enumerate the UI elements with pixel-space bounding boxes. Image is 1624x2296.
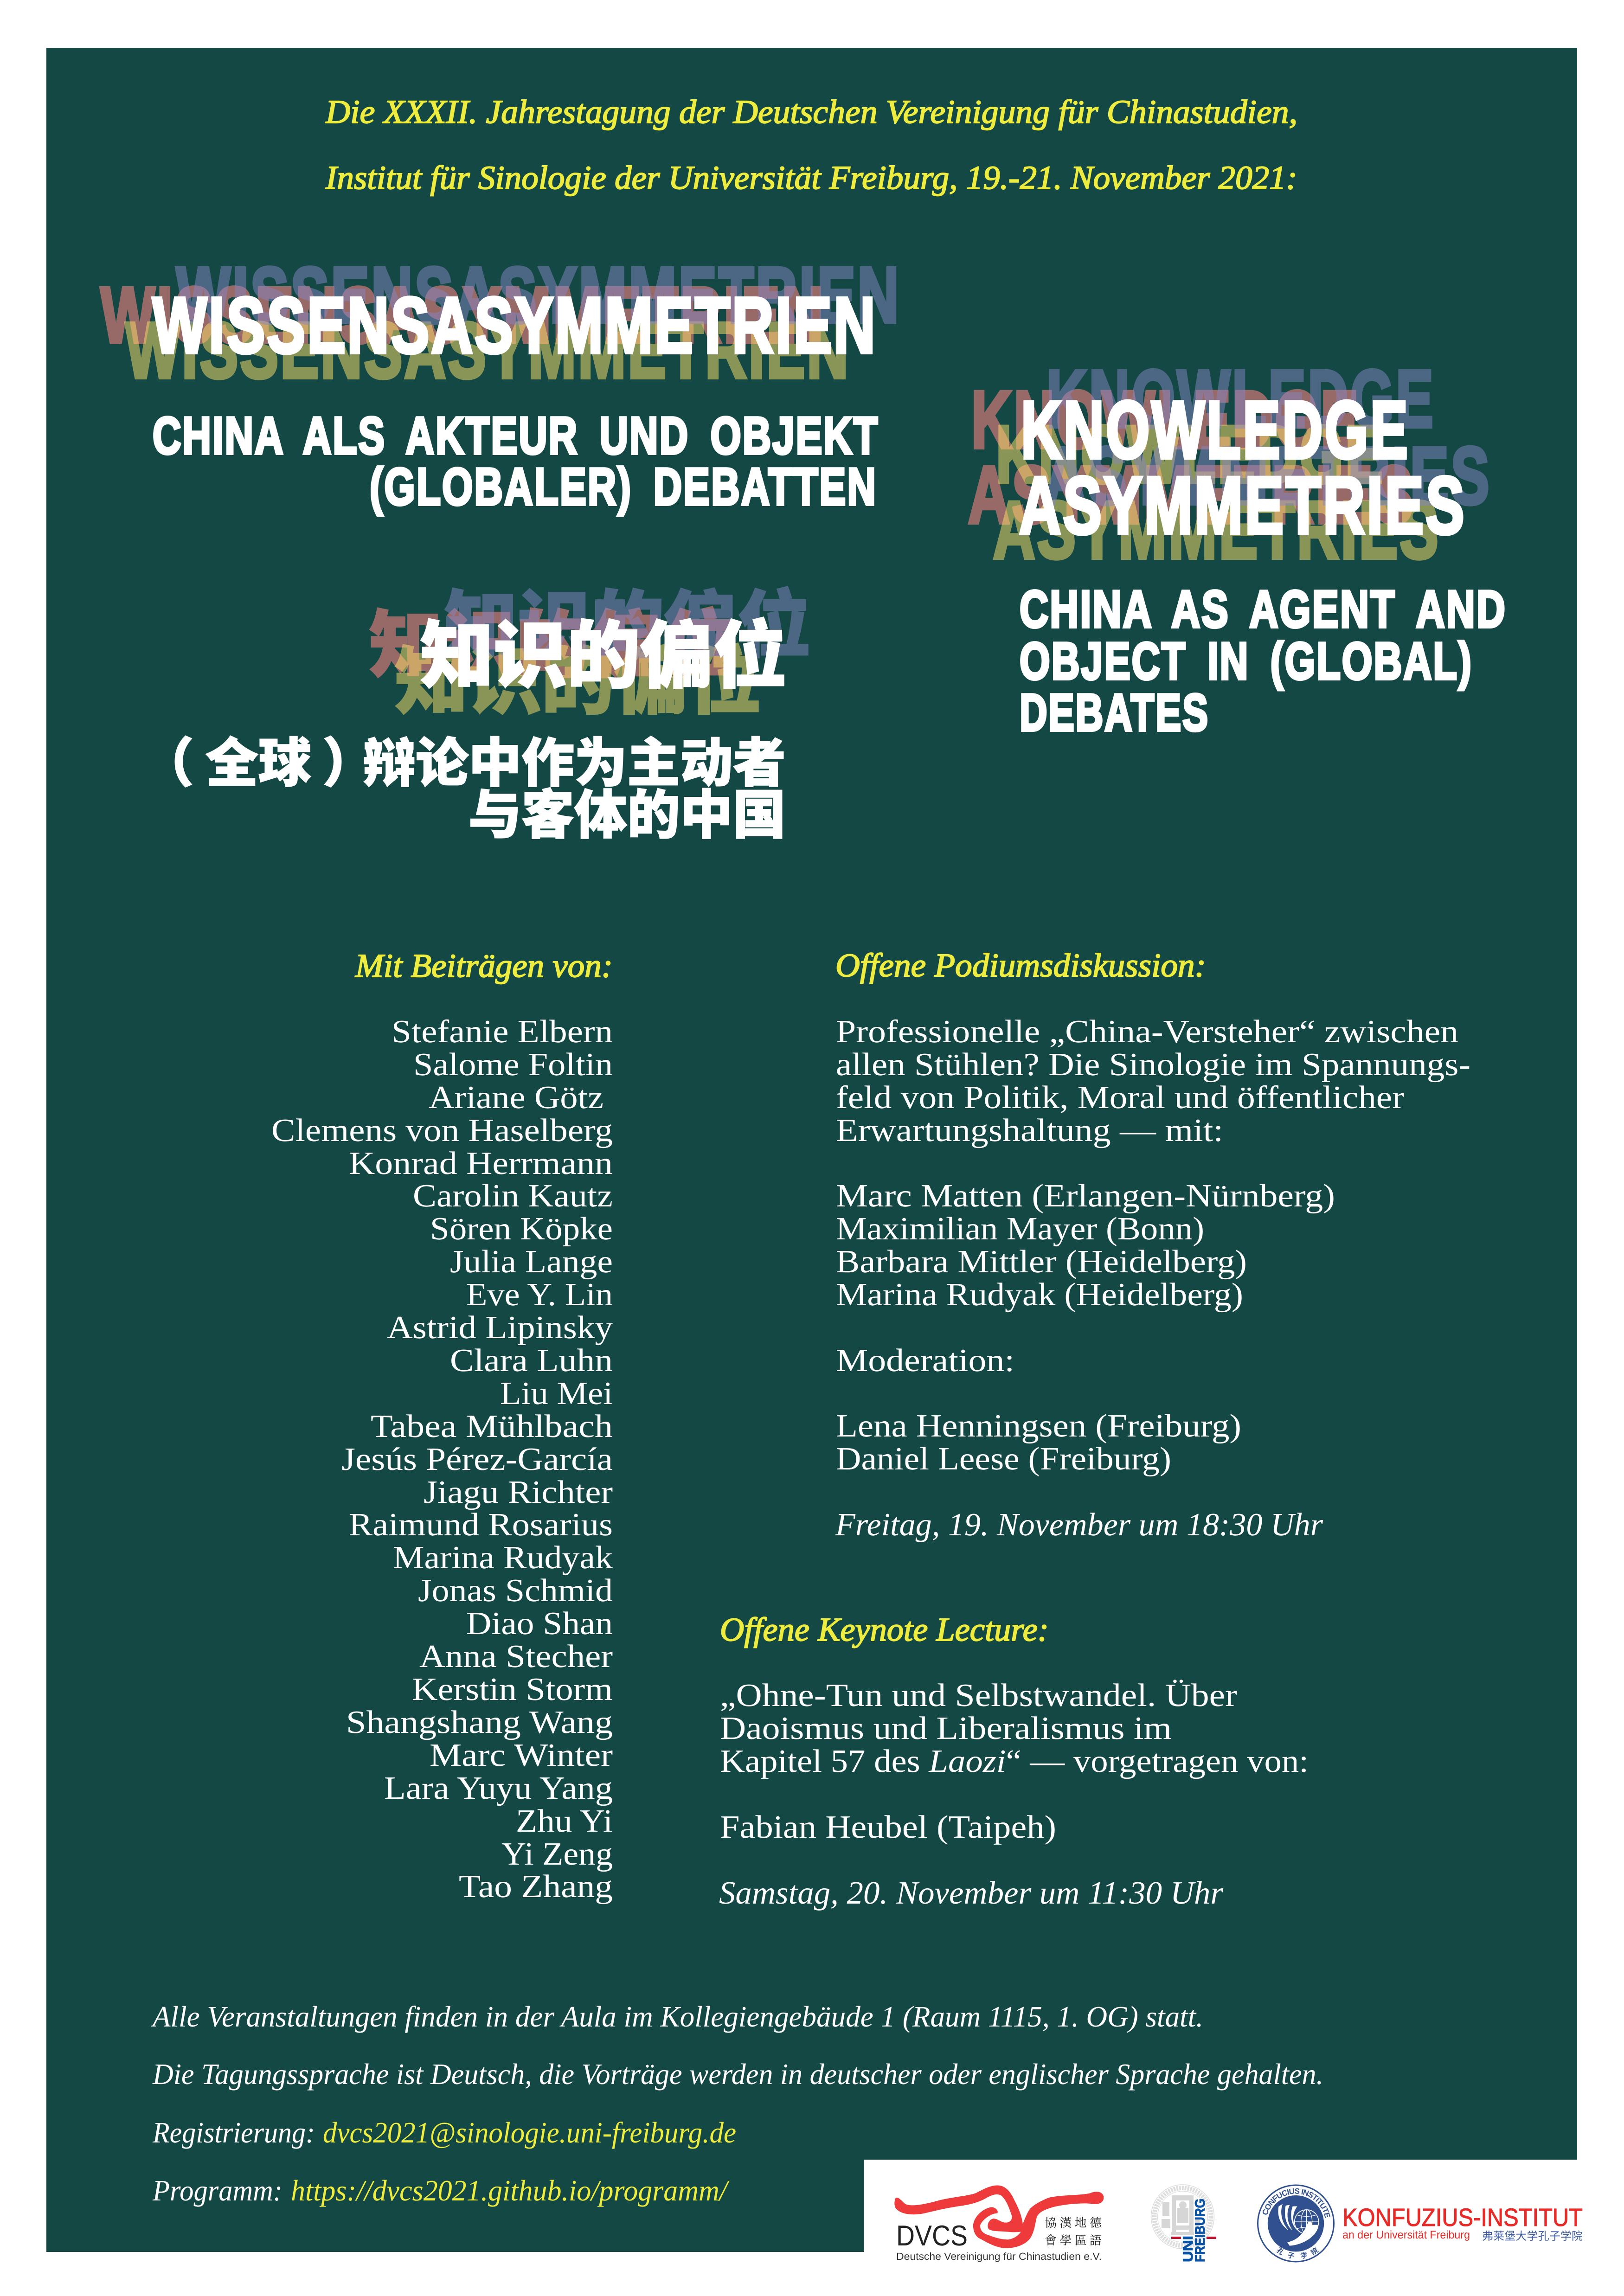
list: contributors: Liu Mei: [500, 1376, 613, 1411]
list: contributors: Julia Lange: [450, 1244, 613, 1280]
icon: Confucius seal: CONFUCIUS INSTITUTE: [1260, 2187, 1332, 2219]
logo: DVCS: 協漢地德: [1045, 2216, 1102, 2230]
list: contributors: Tabea Mühlbach: [371, 1409, 613, 1444]
subtitle: Chinese: （: [141, 734, 194, 793]
subtitle: Chinese: 与客体的中国: [469, 786, 786, 845]
header: conference line: Die XXXII. Jahrestagung der Deutschen Vereinigung für Chinastudien,: [325, 93, 1297, 130]
text block: practical information: dvcs2021@sinologie.uni-freiburg.de: [323, 2116, 736, 2149]
title: Chinese layered heading: 知识的偏位: [420, 616, 787, 697]
list: contributors: Ariane Götz: [429, 1080, 603, 1116]
text block: keynote lecture: „Ohne-Tun und Selbstwandel. Über: [720, 1678, 1237, 1713]
text block: practical information: https://dvcs2021.github.io/programm/: [291, 2174, 730, 2207]
subtitle: German: (GLOBALER) DEBATTEN: [370, 457, 877, 516]
list: contributors: Astrid Lipinsky: [387, 1310, 613, 1346]
subtitle: English: DEBATES: [1020, 683, 1209, 742]
logo: Confucius Institute: an der Universität Freiburg: [1342, 2229, 1470, 2241]
heading: panel discussion: Offene Podiumsdiskussion:: [835, 947, 1206, 984]
list: contributors: Stefanie Elbern: [392, 1014, 613, 1050]
text block: panel discussion: Erwartungshaltung — mit:: [836, 1113, 1223, 1148]
logo: DVCS: Deutsche Vereinigung für Chinastudien e.V.: [896, 2251, 1102, 2262]
subtitle: Chinese: 辩论中作为主动者: [363, 734, 786, 793]
icon: red ribbon: [894, 2185, 1104, 2248]
list: contributors: Shangshang Wang: [346, 1705, 613, 1740]
title: English layered heading: ASYMMETRIES: [968, 450, 1415, 540]
text block: panel discussion: Marc Matten (Erlangen-Nürnberg): [836, 1178, 1335, 1214]
list: contributors: Eve Y. Lin: [466, 1277, 613, 1313]
text block: practical information: [151, 2000, 1323, 2207]
icon: Confucius seal: [1258, 2185, 1334, 2262]
subtitle: German: CHINA ALS AKTEUR UND OBJEKT: [153, 406, 879, 465]
list: contributors: Sören Köpke: [430, 1211, 613, 1247]
title: Chinese layered heading: [369, 585, 811, 723]
text block: panel discussion: Barbara Mittler (Heidelberg): [836, 1244, 1247, 1280]
list: contributors: Yi Zeng: [501, 1836, 613, 1872]
title: German layered heading: WISSENSASYMMETRIEN: [126, 307, 850, 395]
title: English layered heading: KNOWLEDGE: [996, 410, 1385, 500]
title: Chinese layered heading: 知识的偏位: [369, 605, 736, 686]
title: German layered heading: WISSENSASYMMETRIEN: [176, 251, 901, 340]
list: contributors: Marina Rudyak: [393, 1540, 613, 1576]
list: contributors: Jonas Schmid: [418, 1573, 613, 1609]
title: German layered heading: [101, 251, 901, 395]
subtitle: English: [1020, 580, 1507, 742]
logo: Uni Freiburg: UNI: [1181, 2236, 1196, 2262]
list: contributors: Zhu Yi: [516, 1803, 613, 1839]
logo: Uni Freiburg: [1151, 2185, 1216, 2262]
subtitle: English: OBJECT IN (GLOBAL): [1020, 632, 1473, 690]
list: contributors: Jiagu Richter: [424, 1475, 613, 1510]
subtitle: Chinese: 全球: [205, 734, 311, 793]
title: Chinese layered heading: 知识的偏位: [444, 585, 811, 667]
icon: Confucius seal: 院: [1309, 2246, 1320, 2257]
text block: practical information: Die Tagungssprache ist Deutsch, die Vorträge werden in deutscher oder englischer Sprache gehalten.: [152, 2058, 1323, 2091]
icon: university seal: [1151, 2185, 1214, 2249]
list: contributors: Raimund Rosarius: [349, 1507, 613, 1543]
list: contributors: Salome Foltin: [413, 1047, 613, 1083]
logo: DVCS: DVCS: [896, 2220, 968, 2252]
title: Chinese layered heading: 知识的偏位: [395, 641, 761, 723]
text block: keynote lecture: Kapitel 57 des Laozi“ — vorgetragen von:: [720, 1744, 1309, 1779]
list: contributors: Clara Luhn: [450, 1343, 613, 1379]
list: contributors: Clemens von Haselberg: [271, 1113, 613, 1148]
title: English layered heading: KNOWLEDGE: [971, 375, 1360, 465]
list: contributors: Konrad Herrmann: [349, 1146, 613, 1181]
list: contributors: Diao Shan: [466, 1606, 613, 1642]
logo: Confucius Institute: 弗莱堡大学孔子学院: [1482, 2230, 1583, 2243]
list: contributors: Carolin Kautz: [413, 1178, 613, 1214]
text block: panel discussion: allen Stühlen? Die Sinologie im Spannungs-: [836, 1047, 1470, 1083]
title: English layered heading: [968, 354, 1491, 576]
text block: practical information: Alle Veranstaltungen finden in der Aula im Kollegiengebäude 1 (Raum 1115, 1. OG) statt.: [151, 2000, 1203, 2033]
title: English layered heading: ASYMMETRIES: [993, 485, 1440, 576]
title: German layered heading: WISSENSASYMMETRIEN: [101, 271, 825, 359]
logo: Uni Freiburg: FREIBURG: [1193, 2199, 1208, 2262]
title: German layered heading: WISSENSASYMMETRIEN: [153, 282, 877, 370]
header: conference line: Institut für Sinologie der Universität Freiburg, 19.-21. November 2021:: [325, 159, 1297, 196]
logo: Confucius Institute: [1258, 2185, 1583, 2262]
list: contributors: Kerstin Storm: [412, 1672, 613, 1707]
list: contributors: Marc Winter: [430, 1738, 613, 1773]
text block: panel discussion: Maximilian Mayer (Bonn): [836, 1211, 1204, 1247]
heading: keynote lecture: Offene Keynote Lecture:: [720, 1611, 1049, 1648]
title: English layered heading: KNOWLEDGE: [1021, 385, 1410, 475]
logo: DVCS: 會學區語: [1045, 2234, 1102, 2247]
subtitle: Chinese: [141, 734, 786, 845]
list: contributors: Anna Stecher: [419, 1639, 613, 1674]
text block: keynote lecture: Samstag, 20. November um 11:30 Uhr: [719, 1875, 1224, 1911]
logo: Confucius Institute: KONFUZIUS-INSTITUT: [1342, 2204, 1583, 2232]
list: contributors: [271, 1014, 613, 1905]
text block: panel discussion: [835, 1014, 1470, 1543]
logo: DVCS: [894, 2185, 1104, 2262]
list: contributors: Tao Zhang: [459, 1869, 613, 1905]
logo strip background: [864, 2160, 1624, 2296]
text block: keynote lecture: Fabian Heubel (Taipeh): [720, 1809, 1056, 1845]
text block: practical information: Registrierung:: [152, 2116, 315, 2149]
icon: Confucius seal: 孔: [1275, 2246, 1285, 2257]
header: conference line: [325, 93, 1297, 196]
title: English layered heading: KNOWLEDGE: [1046, 354, 1435, 444]
text block: panel discussion: Lena Henningsen (Freiburg): [836, 1408, 1241, 1444]
text block: keynote lecture: Daoismus und Liberalismus im: [720, 1711, 1172, 1746]
list: contributors: Jesús Pérez-García: [341, 1442, 613, 1477]
text block: panel discussion: Moderation:: [836, 1343, 1014, 1379]
subtitle: Chinese: ）: [322, 734, 375, 793]
subtitle: German: [153, 406, 879, 516]
text block: panel discussion: feld von Politik, Moral und öffentlicher: [836, 1080, 1404, 1116]
text block: practical information: Programm:: [152, 2174, 282, 2207]
text block: panel discussion: Freitag, 19. November um 18:30 Uhr: [835, 1507, 1323, 1543]
icon: Confucius seal: 子: [1287, 2251, 1295, 2260]
heading: contributors: Mit Beiträgen von:: [355, 947, 613, 984]
text block: panel discussion: Daniel Leese (Freiburg): [836, 1441, 1171, 1477]
list: contributors: Lara Yuyu Yang: [384, 1770, 613, 1806]
icon: Confucius seal: 学: [1300, 2251, 1308, 2260]
text block: panel discussion: Marina Rudyak (Heidelberg): [836, 1277, 1243, 1313]
text block: keynote lecture: [719, 1678, 1309, 1911]
text block: panel discussion: Professionelle „China-Versteher“ zwischen: [836, 1014, 1458, 1050]
